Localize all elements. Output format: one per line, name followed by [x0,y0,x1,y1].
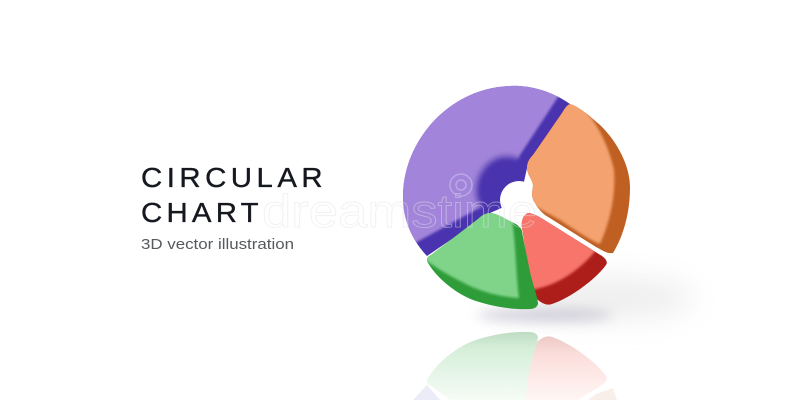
reflection: red [526,336,607,400]
title [141,163,323,229]
segment: orange [527,104,630,254]
circular chart [403,86,630,310]
ground shadow [477,278,695,322]
reflection of the chart [413,332,617,400]
segment: red [522,213,607,305]
subtitle: 3D vector illustration [141,236,294,253]
segment: purple [403,86,570,256]
infographic canvas [142,86,680,400]
watermark: dreamstime [262,185,537,237]
title: CHART [141,198,259,229]
reflection: purple [413,385,440,400]
segment: green [427,213,538,310]
chart centre hole [500,181,538,219]
reflection: green [427,332,538,400]
reflection: orange [588,388,617,400]
title: CIRCULAR [141,163,323,194]
